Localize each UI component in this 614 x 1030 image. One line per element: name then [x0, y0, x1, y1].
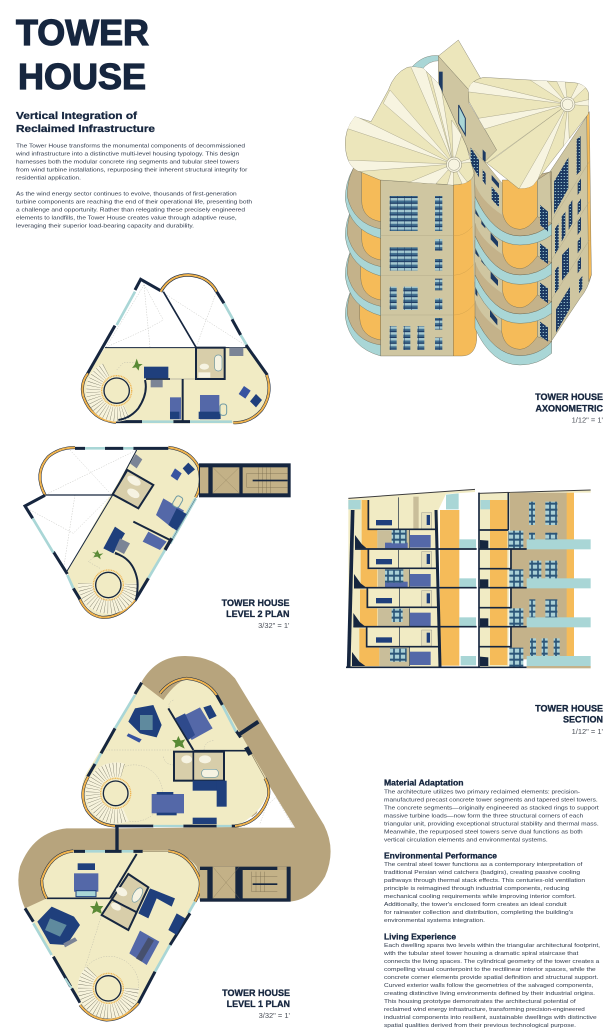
text block: material adaptation: manufactured precast concrete tower segments and tapered steel towers.: [384, 798, 598, 804]
right tower right face: [550, 112, 591, 342]
text block: environmental performance: for rainwater collection and distribution, completing the building's: [384, 910, 573, 916]
intro text: from wind turbine installations, repurposing their inherent structural integrity for: [16, 168, 247, 174]
text block: living experience: Curved exterior walls follow the geometries of the salvaged components,: [384, 983, 594, 989]
intro text: As the wind energy sector continues to evolve, thousands of first-generation: [16, 192, 237, 198]
label: axonometric: 1/12" = 1': [572, 416, 604, 424]
text block: living experience: concrete corner elements provide spatial definition and structural support.: [384, 975, 599, 981]
title: HOUSE: [18, 56, 146, 97]
text block: environmental performance: environmental systems integration.: [384, 918, 485, 924]
left section: [346, 489, 527, 667]
text block: living experience: industrial components into resilient, sustainable dwellings with distinctive: [384, 1015, 597, 1021]
right tower base wall: [469, 103, 552, 360]
label: section: SECTION: [563, 714, 603, 724]
intro text: The Tower House transforms the monumental components of decommissioned: [16, 144, 245, 150]
text block: living experience: Each dwelling spans two levels within the triangular architectural footprint,: [384, 943, 600, 949]
title: [16, 12, 149, 97]
label: level 1 plan: [222, 988, 291, 1020]
upper unit: [82, 678, 293, 827]
label: level 1 plan: LEVEL 1 PLAN: [227, 999, 290, 1009]
subtitle: [16, 111, 155, 135]
label: level 1 plan: 3/32" = 1': [259, 1011, 291, 1020]
label: axonometric: AXONOMETRIC: [536, 404, 604, 414]
label: level 2 plan: TOWER HOUSE: [222, 598, 290, 608]
intro text: turbine components are reaching the end of their operational life, presenting both: [16, 200, 252, 206]
text block: living experience: reclaimed wind energy infrastructure, transforming precision-engineered: [384, 1007, 585, 1013]
text block: living experience: compelling visual counterpoint to the rectilinear interior spaces, while the: [384, 967, 596, 973]
right tower layer 4: [475, 265, 552, 365]
text block: environmental performance: [384, 851, 585, 924]
text block: environmental performance: The central steel tower functions as a contemporary interpretation of: [384, 862, 583, 868]
top teal ring behind roofs: [412, 55, 439, 70]
white courtyard: [238, 782, 295, 828]
right section: [478, 490, 591, 668]
text block: living experience: This housing prototype demonstrates the architectural potential of: [384, 999, 576, 1005]
text block: living experience: [383, 932, 600, 1029]
text block: environmental performance: principle is reimagined through industrial components, reducing: [384, 886, 569, 892]
upper unit: [82, 275, 269, 423]
level 1 plan drawing: [18, 656, 331, 1020]
text block: living experience: creating distinctive living environments defined by their industrial origins.: [384, 991, 595, 997]
label: axonometric: [535, 392, 604, 424]
axonometric drawing: [343, 40, 591, 365]
title: TOWER: [16, 12, 149, 53]
right tower layer 1: [471, 147, 552, 245]
text block: material adaptation: The concrete segments—originally engineered as stacked rings to support: [384, 806, 599, 812]
label: level 2 plan: LEVEL 2 PLAN: [226, 609, 290, 619]
intro text: a challenge and opportunity. Rather than relegating these precisely engineered: [16, 208, 245, 214]
text block: material adaptation: The architecture utilizes two primary reclaimed elements: precision-: [384, 790, 580, 796]
section drawing: [346, 489, 591, 668]
right tower layer 3: [475, 240, 552, 323]
text block: environmental performance: traditional Persian wind catchers (badgirs), creating passive cooling: [384, 870, 580, 876]
left tower windows: [390, 196, 442, 350]
level 2 plan drawing: [25, 275, 291, 617]
intro text: [15, 144, 252, 230]
text block: living experience: Living Experience: [384, 932, 457, 942]
intro text: harnesses both the modular concrete ring segments and tubular steel towers: [16, 160, 239, 166]
intro text: leveraging their superior load-bearing capacity and durability.: [16, 224, 194, 230]
label: level 1 plan: TOWER HOUSE: [222, 988, 290, 998]
left spiral roof: [343, 63, 477, 187]
text block: material adaptation: Material Adaptation: [384, 778, 464, 788]
intro text: wind infrastructure into a distinctive multi-level housing typology. This design: [15, 152, 239, 158]
intro text: residential application.: [16, 176, 81, 182]
text block: material adaptation: [384, 778, 599, 844]
inner wall between towers: [438, 40, 497, 173]
stair core: [199, 463, 291, 497]
text block: material adaptation: vertical circulation elements and environmental systems.: [384, 838, 548, 844]
label: section: 1/12" = 1': [572, 727, 604, 736]
lower unit: [25, 447, 200, 617]
text block: environmental performance: pathways through thermal stack effects. This centuries-old ventilation: [384, 878, 585, 884]
subtitle: Reclaimed Infrastructure: [16, 124, 155, 135]
left tower lobes: [345, 168, 381, 356]
text block: living experience: with the tubular steel tower housing a dramatic spiral staircase that: [383, 951, 579, 957]
label: axonometric: TOWER HOUSE: [535, 392, 603, 402]
stair core and divider: [115, 827, 291, 902]
text block: material adaptation: triangular unit, providing exceptional structural stability and thermal mass.: [384, 822, 599, 828]
text block: living experience: connects the living spaces. The cylindrical geometry of the tower creates a: [384, 959, 600, 965]
right tower layer 2: [475, 201, 552, 284]
walkway: [18, 656, 331, 908]
text block: environmental performance: Additionally, the tower's enclosed form creates an ideal conduit: [384, 902, 567, 908]
label: level 2 plan: 3/32" = 1': [258, 621, 290, 630]
label: section: [535, 704, 604, 736]
text block: material adaptation: Meanwhile, the repurposed steel towers serve dual functions as both: [384, 830, 583, 836]
text block: material adaptation: massive turbine loads—now form the three structural corners of each: [384, 814, 583, 820]
label: level 2 plan: [222, 598, 290, 630]
label: section: TOWER HOUSE: [535, 704, 603, 714]
text block: environmental performance: Environmental Performance: [384, 851, 498, 860]
left tower front face: [381, 175, 477, 356]
subtitle: Vertical Integration of: [16, 111, 138, 122]
right spiral roof: [467, 77, 590, 190]
intro text: elements to landfills, the Tower House creates value through adaptive reuse,: [16, 216, 237, 222]
lower unit: [25, 851, 200, 1020]
text block: environmental performance: mechanical cooling requirements while improving interior comfort.: [384, 894, 576, 900]
text block: living experience: spatial qualities derived from their previous technological purpose.: [384, 1023, 576, 1029]
